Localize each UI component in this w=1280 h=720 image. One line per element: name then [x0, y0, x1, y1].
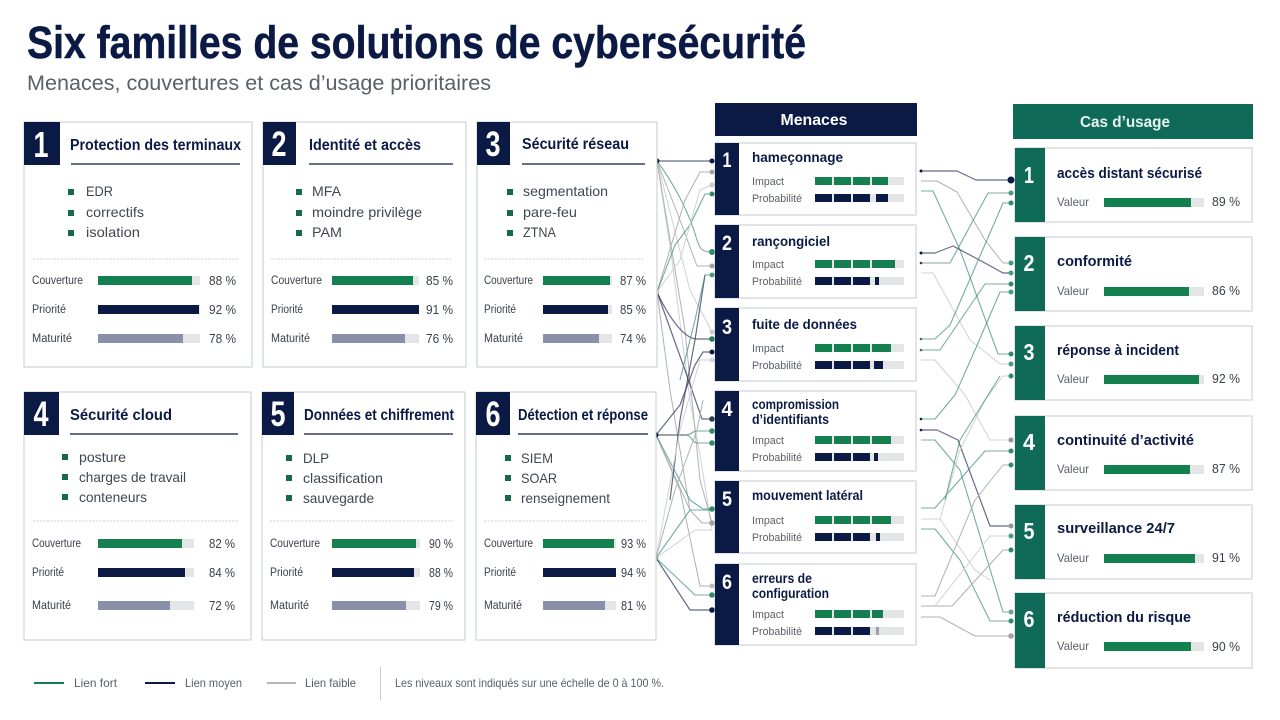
list: [507, 183, 608, 240]
threat 1: Probabilité: [752, 193, 802, 205]
list: [62, 449, 186, 505]
use case 4: Valeur: [1057, 462, 1089, 476]
list: classification: [303, 470, 383, 486]
list: DLP: [303, 450, 329, 466]
threat 6: configuration: [752, 586, 829, 601]
legend: [34, 667, 664, 700]
bars: Couverture: [484, 538, 533, 550]
bars: Priorité: [484, 304, 516, 316]
heading: Protection des terminaux: [70, 137, 241, 154]
list: moindre privilège: [312, 204, 422, 220]
list: segmentation: [523, 183, 608, 199]
heading: Détection et réponse: [518, 407, 648, 424]
list: PAM: [312, 224, 342, 240]
bars: Maturité: [270, 600, 309, 612]
threat 5: [715, 481, 916, 553]
use case 4: 4: [1023, 429, 1035, 455]
list: SIEM: [521, 450, 553, 466]
threat 3: 3: [722, 316, 732, 339]
threat 6: 6: [722, 571, 732, 594]
use case 6: réduction du risque: [1057, 609, 1191, 626]
list: ZTNA: [523, 224, 557, 240]
bars: 85 %: [426, 274, 453, 288]
use case 3: Valeur: [1057, 372, 1089, 386]
bars: Maturité: [484, 333, 523, 345]
use case 1: accès distant sécurisé: [1057, 165, 1202, 182]
list: [68, 183, 144, 240]
panel: famille 4: 4: [34, 395, 49, 434]
panel: famille 5: 5: [270, 395, 286, 434]
list: conteneurs: [79, 489, 147, 505]
bars: 92 %: [209, 303, 236, 317]
threat 3: [715, 308, 916, 381]
bars: Maturité: [484, 600, 522, 612]
threat 1: Impact: [752, 176, 784, 188]
bars: Priorité: [484, 567, 516, 579]
threat 5: 5: [722, 488, 732, 511]
use case 4: continuité d’activité: [1057, 432, 1194, 449]
threat 2: rançongiciel: [752, 233, 830, 249]
use case 2: 2: [1024, 250, 1034, 276]
bars: Couverture: [271, 275, 322, 287]
threat 4: 4: [722, 398, 733, 421]
use case 3: [1015, 326, 1252, 400]
bars: 91 %: [426, 303, 453, 317]
panel: famille 6: 6: [486, 395, 500, 434]
bars: [271, 274, 453, 346]
use case 2: conformité: [1057, 253, 1132, 270]
bars: 72 %: [209, 599, 235, 613]
bars: Maturité: [271, 333, 310, 345]
bars: Priorité: [271, 304, 303, 316]
bars: 93 %: [621, 537, 646, 551]
use case 3: 3: [1024, 339, 1034, 365]
bars: 94 %: [621, 566, 646, 580]
heading: Sécurité réseau: [522, 136, 629, 153]
title: Six familles de solutions de cybersécurité: [27, 17, 806, 68]
list: pare-feu: [523, 204, 577, 220]
threat 2: Impact: [752, 259, 784, 271]
bars: [32, 274, 236, 346]
threat 5: Impact: [752, 515, 784, 527]
bars: 84 %: [209, 566, 235, 580]
use case 3: 92 %: [1212, 371, 1240, 386]
use case 5: 5: [1024, 518, 1035, 544]
panel: famille 6: [476, 392, 656, 640]
threat 1: [715, 143, 916, 215]
threat 2: [715, 225, 916, 298]
bars: [32, 537, 235, 613]
legend: Lien faible: [305, 676, 356, 690]
header: Menaces: Menaces: [780, 112, 848, 129]
bars: Couverture: [484, 275, 533, 287]
threat 6: Impact: [752, 609, 784, 621]
threat 4: compromission: [752, 397, 839, 412]
use case 1: [1015, 148, 1252, 222]
bars: 87 %: [620, 274, 646, 288]
panel: famille 3: [477, 122, 657, 367]
connectors: threats to use cases: [920, 170, 1014, 639]
threat 5: mouvement latéral: [752, 487, 863, 503]
panel: famille 1: 1: [34, 124, 48, 165]
legend: Les niveaux sont indiqués sur une échelle de 0 à 100 %.: [395, 676, 664, 690]
list: renseignement: [521, 490, 610, 506]
bars: Maturité: [32, 600, 71, 612]
legend: Lien fort: [74, 676, 118, 690]
heading: Données et chiffrement: [304, 407, 454, 424]
header: Menaces: [715, 103, 917, 136]
list: SOAR: [521, 470, 557, 486]
use case 5: [1015, 505, 1252, 579]
use case 6: [1015, 593, 1252, 668]
header: Cas d'usage: [1013, 104, 1253, 139]
use case 6: Valeur: [1057, 639, 1089, 653]
use case 5: Valeur: [1057, 551, 1089, 565]
use case 2: Valeur: [1057, 284, 1089, 298]
panel: famille 1: [24, 122, 252, 367]
threat 1: hameçonnage: [752, 149, 843, 165]
bars: 88 %: [429, 566, 453, 580]
bars: Couverture: [32, 538, 81, 550]
list: isolation: [86, 224, 140, 240]
bars: 82 %: [209, 537, 235, 551]
legend: Lien moyen: [185, 676, 242, 690]
use case 6: 90 %: [1212, 639, 1240, 654]
list: EDR: [86, 183, 113, 199]
bars: 79 %: [429, 599, 453, 613]
use case 6: 6: [1024, 606, 1034, 632]
subtitle: Menaces, couvertures et cas d’usage prioritaires: [27, 72, 491, 95]
list: MFA: [312, 183, 342, 199]
use case 2: [1015, 237, 1252, 311]
threat 4: Probabilité: [752, 452, 802, 464]
bars: 76 %: [426, 332, 453, 346]
threat 3: Impact: [752, 343, 784, 355]
list: [286, 450, 383, 506]
connectors: families to threats: [654, 158, 715, 613]
threat 4: d’identifiants: [752, 412, 829, 427]
list: charges de travail: [79, 469, 186, 485]
bars: Maturité: [32, 333, 72, 345]
use case 1: 89 %: [1212, 194, 1240, 209]
threat 5: Probabilité: [752, 532, 802, 544]
use case 4: 87 %: [1212, 461, 1240, 476]
list: [296, 183, 422, 240]
list: posture: [79, 449, 126, 465]
heading: Sécurité cloud: [70, 407, 172, 424]
threat 2: Probabilité: [752, 276, 802, 288]
use case 3: réponse à incident: [1057, 342, 1179, 359]
panel: famille 4: [24, 392, 251, 640]
list: [505, 450, 610, 506]
use case 2: 86 %: [1212, 283, 1240, 298]
use case 1: 1: [1024, 162, 1034, 188]
threat 1: 1: [722, 149, 732, 172]
panel: famille 2: 2: [272, 125, 286, 164]
use case 4: [1015, 416, 1252, 490]
threat 6: [715, 564, 916, 645]
threat 2: 2: [722, 232, 732, 255]
header: Cas d'usage: Cas d’usage: [1080, 114, 1170, 131]
heading: Identité et accès: [309, 137, 421, 154]
panel: famille 5: [262, 392, 465, 640]
bars: 85 %: [620, 303, 646, 317]
bars: 90 %: [429, 537, 453, 551]
bars: Priorité: [32, 304, 66, 316]
bars: Couverture: [32, 275, 83, 287]
bars: Priorité: [32, 567, 64, 579]
bars: 78 %: [209, 332, 236, 346]
bars: 74 %: [620, 332, 646, 346]
panel: famille 2: [263, 122, 466, 367]
threat 3: Probabilité: [752, 360, 802, 372]
threat 3: fuite de données: [752, 316, 857, 332]
threat 6: erreurs de: [752, 571, 812, 586]
use case 1: Valeur: [1057, 195, 1089, 209]
list: correctifs: [86, 204, 144, 220]
bars: 88 %: [209, 274, 236, 288]
use case 5: 91 %: [1212, 550, 1240, 565]
threat 4: Impact: [752, 435, 784, 447]
bars: [484, 274, 646, 346]
list: sauvegarde: [303, 490, 374, 506]
use case 5: surveillance 24/7: [1057, 520, 1175, 537]
panel: famille 3: 3: [486, 125, 500, 164]
threat 4: [715, 391, 916, 471]
threat 6: Probabilité: [752, 626, 802, 638]
bars: 81 %: [621, 599, 646, 613]
bars: Priorité: [270, 567, 303, 579]
bars: Couverture: [270, 538, 320, 550]
bars: [270, 537, 453, 613]
bars: [484, 537, 646, 613]
